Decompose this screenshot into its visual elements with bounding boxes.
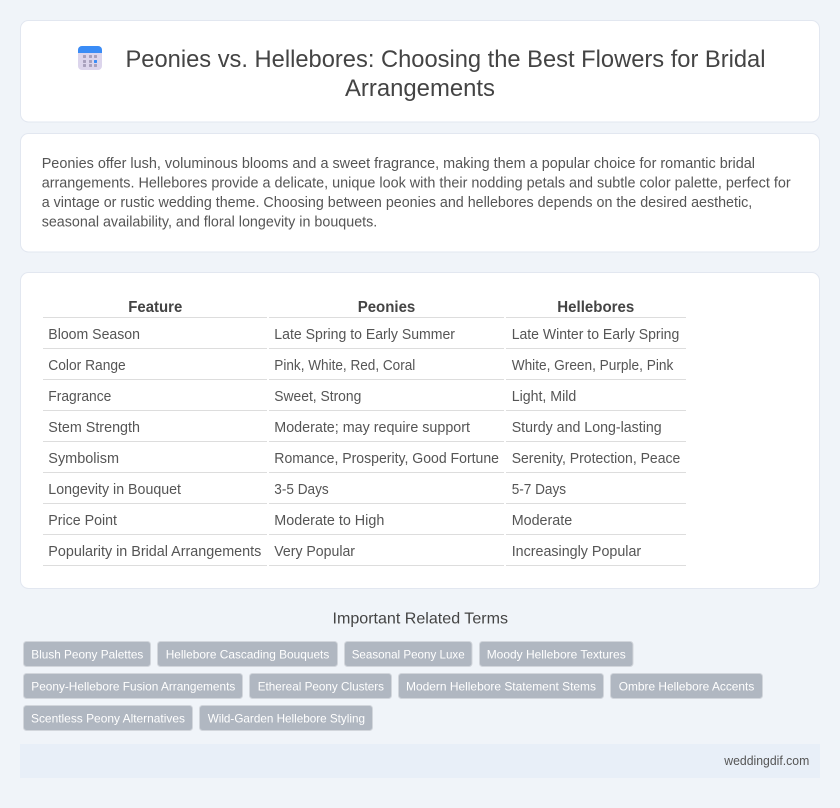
tag: modern hellebore statement stems: Modern Hellebore Statement Stems [406, 679, 596, 693]
row: fragrance: Fragrance [48, 389, 111, 405]
row: stem strength: Moderate; may require support [274, 420, 470, 436]
intro text block: a vintage or rustic wedding theme. Choosing between peonies and hellebores depends on the desired aesthetic, [42, 195, 752, 211]
tag: scentless peony alternatives: Scentless Peony Alternatives [31, 711, 185, 725]
tag: wild-garden hellebore styling [200, 706, 372, 730]
tag: scentless peony alternatives [24, 706, 192, 730]
tag: ethereal peony clusters: Ethereal Peony Clusters [258, 679, 384, 693]
table header row [43, 299, 686, 318]
tag: seasonal peony luxe: Seasonal Peony Luxe [352, 647, 465, 661]
row: symbolism: Serenity, Protection, Peace [512, 451, 680, 467]
related term tags [24, 642, 762, 730]
intro text block [42, 156, 791, 230]
tag: wild-garden hellebore styling: Wild-Garden Hellebore Styling [208, 711, 365, 725]
row: color range: Color Range [48, 358, 126, 374]
tag: seasonal peony luxe [344, 642, 472, 666]
footer source text: weddingdif.com [723, 753, 809, 768]
row: symbolism: Romance, Prosperity, Good Fortune [274, 451, 499, 467]
row: price point: Moderate to High [274, 513, 384, 529]
table header row: Hellebores [557, 299, 634, 316]
row: symbolism: Symbolism [48, 451, 119, 467]
row: color range [43, 358, 686, 380]
icon: calendar [78, 46, 102, 70]
row: longevity in bouquet: 5-7 Days [512, 482, 566, 498]
intro text block: arrangements. Hellebores provide a delicate, unique look with their nodding petals and subtle color palette, perfect for [42, 175, 791, 191]
tag: hellebore cascading bouquets [158, 642, 338, 666]
row: popularity in bridal arrangements: Increasingly Popular [512, 544, 641, 560]
row: bloom season [43, 327, 686, 349]
row: symbolism [43, 451, 686, 473]
tag: blush peony palettes: Blush Peony Palettes [31, 647, 143, 661]
intro text block: seasonal availability, and floral longevity in bouquets. [42, 214, 377, 230]
row: price point: Price Point [48, 513, 117, 529]
row: bloom season: Late Winter to Early Spring [512, 327, 679, 343]
tag: ethereal peony clusters [250, 674, 392, 698]
tag: modern hellebore statement stems [398, 674, 604, 698]
row: longevity in bouquet: 3-5 Days [274, 482, 329, 498]
row: fragrance [43, 389, 686, 411]
row: price point [43, 513, 686, 535]
row: longevity in bouquet: Longevity in Bouquet [48, 482, 181, 498]
panel: intro description [20, 134, 820, 252]
row: price point: Moderate [512, 513, 572, 529]
tag: peony-hellebore fusion arrangements: Peony-Hellebore Fusion Arrangements [31, 679, 235, 693]
row: popularity in bridal arrangements: Popularity in Bridal Arrangements [48, 544, 261, 560]
title [126, 46, 766, 102]
tag: moody hellebore textures: Moody Hellebore Textures [487, 647, 626, 661]
intro text block: Peonies offer lush, voluminous blooms and a sweet fragrance, making them a popular choice for romantic bridal [42, 156, 755, 172]
row: longevity in bouquet [43, 482, 686, 504]
panel: page title card [20, 20, 820, 122]
row: bloom season: Late Spring to Early Summer [274, 327, 455, 343]
title: Peonies vs. Hellebores: Choosing the Best Flowers for Bridal [126, 46, 766, 73]
row: color range: Pink, White, Red, Coral [274, 358, 415, 374]
row: popularity in bridal arrangements [43, 544, 686, 566]
row: fragrance: Light, Mild [512, 389, 576, 405]
row: stem strength: Stem Strength [48, 420, 140, 436]
table header row: Peonies [358, 299, 415, 316]
table header row: Feature [128, 299, 183, 316]
row: bloom season: Bloom Season [48, 327, 140, 343]
tag: blush peony palettes [24, 642, 150, 666]
heading: important related terms: Important Related Terms [332, 610, 508, 628]
tag: moody hellebore textures [480, 642, 633, 666]
row: popularity in bridal arrangements: Very Popular [274, 544, 355, 560]
tag: ombre hellebore accents: Ombre Hellebore Accents [619, 679, 754, 693]
panel: comparison table [20, 272, 820, 588]
title: Arrangements [345, 75, 495, 102]
footer bar [20, 744, 820, 778]
row: color range: White, Green, Purple, Pink [512, 358, 674, 374]
row: fragrance: Sweet, Strong [274, 389, 361, 405]
tag: hellebore cascading bouquets: Hellebore Cascading Bouquets [166, 647, 329, 661]
row: stem strength [43, 420, 686, 442]
tag: ombre hellebore accents [610, 674, 762, 698]
row: stem strength: Sturdy and Long-lasting [512, 420, 662, 436]
tag: peony-hellebore fusion arrangements [24, 674, 242, 698]
